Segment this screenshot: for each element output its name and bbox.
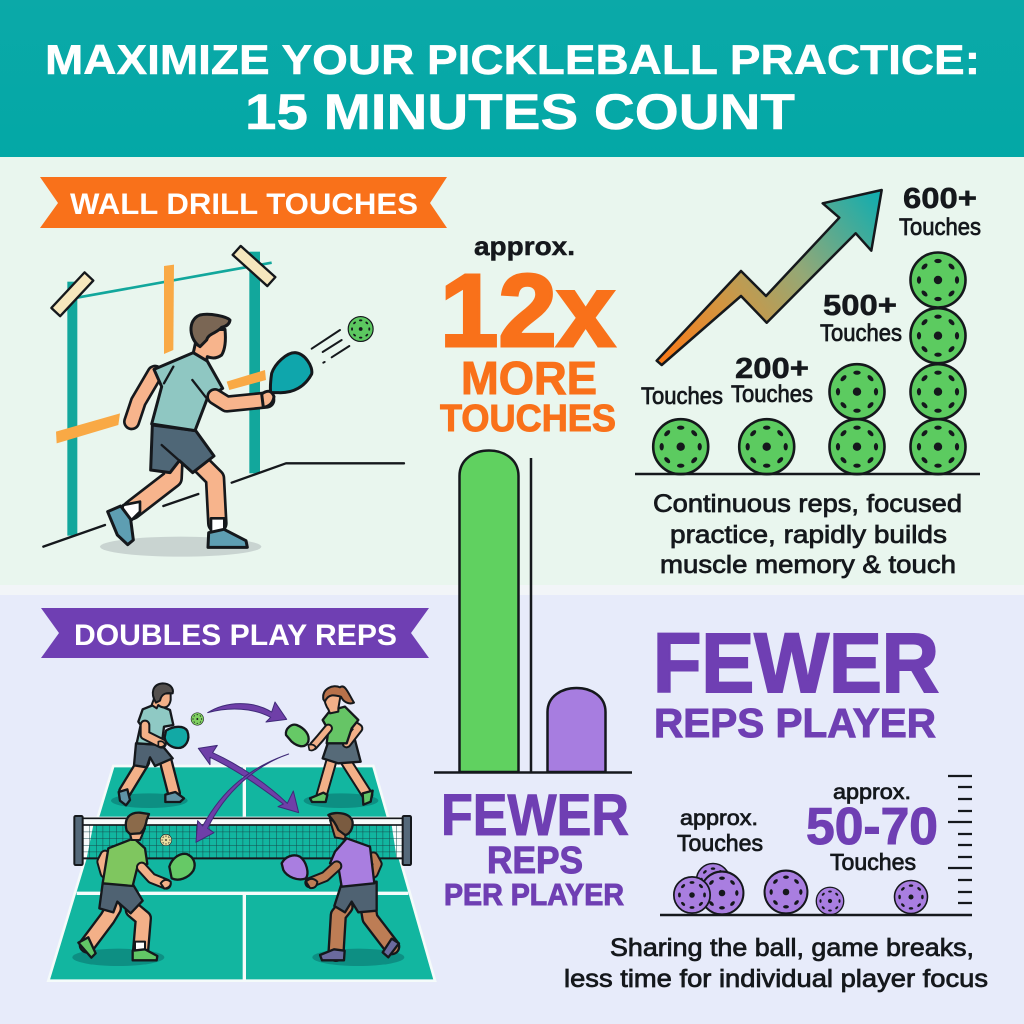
heading: fewer reps per player (center): REPS xyxy=(487,840,583,882)
paddle xyxy=(270,353,312,393)
player back arm xyxy=(132,373,155,422)
comparison bar chart xyxy=(434,450,632,772)
heading: more touches: MORE xyxy=(461,352,597,404)
arrows: ball movement xyxy=(196,702,299,842)
text: wall drill benefits: practice, rapidly builds xyxy=(670,521,947,549)
small ball top xyxy=(191,713,204,725)
text: doubles drawbacks xyxy=(564,934,988,993)
heading: fewer reps per player (center): PER PLAYER xyxy=(444,877,624,912)
player top left xyxy=(119,683,188,805)
player shorts xyxy=(151,425,214,473)
header band xyxy=(0,0,1024,157)
touch count labels: Touches xyxy=(731,381,813,408)
text: wall drill benefits xyxy=(653,490,962,579)
heading: fewer reps player (right): FEWER xyxy=(653,616,939,710)
player top right xyxy=(286,686,373,805)
heading: more touches: TOUCHES xyxy=(440,398,616,440)
player legs xyxy=(132,463,173,510)
banner: wall drill touches: WALL DRILL TOUCHES xyxy=(70,188,418,221)
title: MAXIMIZE YOUR PICKLEBALL PRACTICE: xyxy=(45,36,980,83)
banner: doubles play reps xyxy=(41,608,429,658)
title xyxy=(45,36,980,140)
player front arm xyxy=(215,397,267,404)
title: 15 MINUTES COUNT xyxy=(245,84,795,140)
big stat: 50-70: 50-70 xyxy=(806,798,938,856)
touch count labels: 500+ xyxy=(823,290,897,322)
text: doubles drawbacks: Sharing the ball, game breaks, xyxy=(610,934,974,962)
pickleball xyxy=(348,317,373,341)
labels: approx touches: approx. xyxy=(833,781,911,804)
purple balls chart xyxy=(660,864,972,915)
panel: doubles play background xyxy=(0,590,1024,1024)
banner: wall drill touches xyxy=(40,177,447,228)
labels: approx touches: Touches xyxy=(830,849,916,875)
panel: wall drill background xyxy=(0,157,1024,590)
illustration: doubles court xyxy=(48,683,435,981)
touch count labels: Touches xyxy=(641,383,723,410)
touch count labels: Touches xyxy=(899,214,981,241)
player neck and head xyxy=(193,329,225,361)
labels: approx touches xyxy=(677,781,916,875)
touch count labels xyxy=(641,183,981,410)
illustration: player hitting against wall xyxy=(43,246,404,557)
touch count labels: 600+ xyxy=(903,183,977,215)
player bottom left xyxy=(78,813,195,960)
heading: fewer reps player (right): REPS PLAYER xyxy=(654,700,936,746)
label: approx: approx. xyxy=(474,231,575,261)
player shirt xyxy=(152,353,223,431)
heading: more touches xyxy=(440,352,616,440)
heading: fewer reps player (right) xyxy=(653,616,939,746)
touch count labels: 200+ xyxy=(735,353,809,385)
heading: fewer reps per player (center) xyxy=(441,783,629,912)
ruler scale xyxy=(948,776,972,903)
text: doubles drawbacks: less time for individual player focus xyxy=(564,965,988,993)
small ball net xyxy=(160,834,172,846)
net xyxy=(74,816,411,865)
court xyxy=(48,766,435,981)
banner: doubles play reps: DOUBLES PLAY REPS xyxy=(74,619,397,652)
growth arrow xyxy=(657,190,882,365)
text: wall drill benefits: muscle memory & touch xyxy=(660,551,956,579)
heading: fewer reps per player (center): FEWER xyxy=(441,783,629,848)
player bottom right xyxy=(282,813,399,960)
big stat: 12x: 12x xyxy=(440,253,615,368)
labels: approx touches: Touches xyxy=(677,830,763,856)
text: wall drill benefits: Continuous reps, focused xyxy=(653,490,962,518)
touch count labels: Touches xyxy=(820,320,902,347)
labels: approx touches: approx. xyxy=(680,807,758,830)
stacked green balls chart xyxy=(635,252,980,474)
